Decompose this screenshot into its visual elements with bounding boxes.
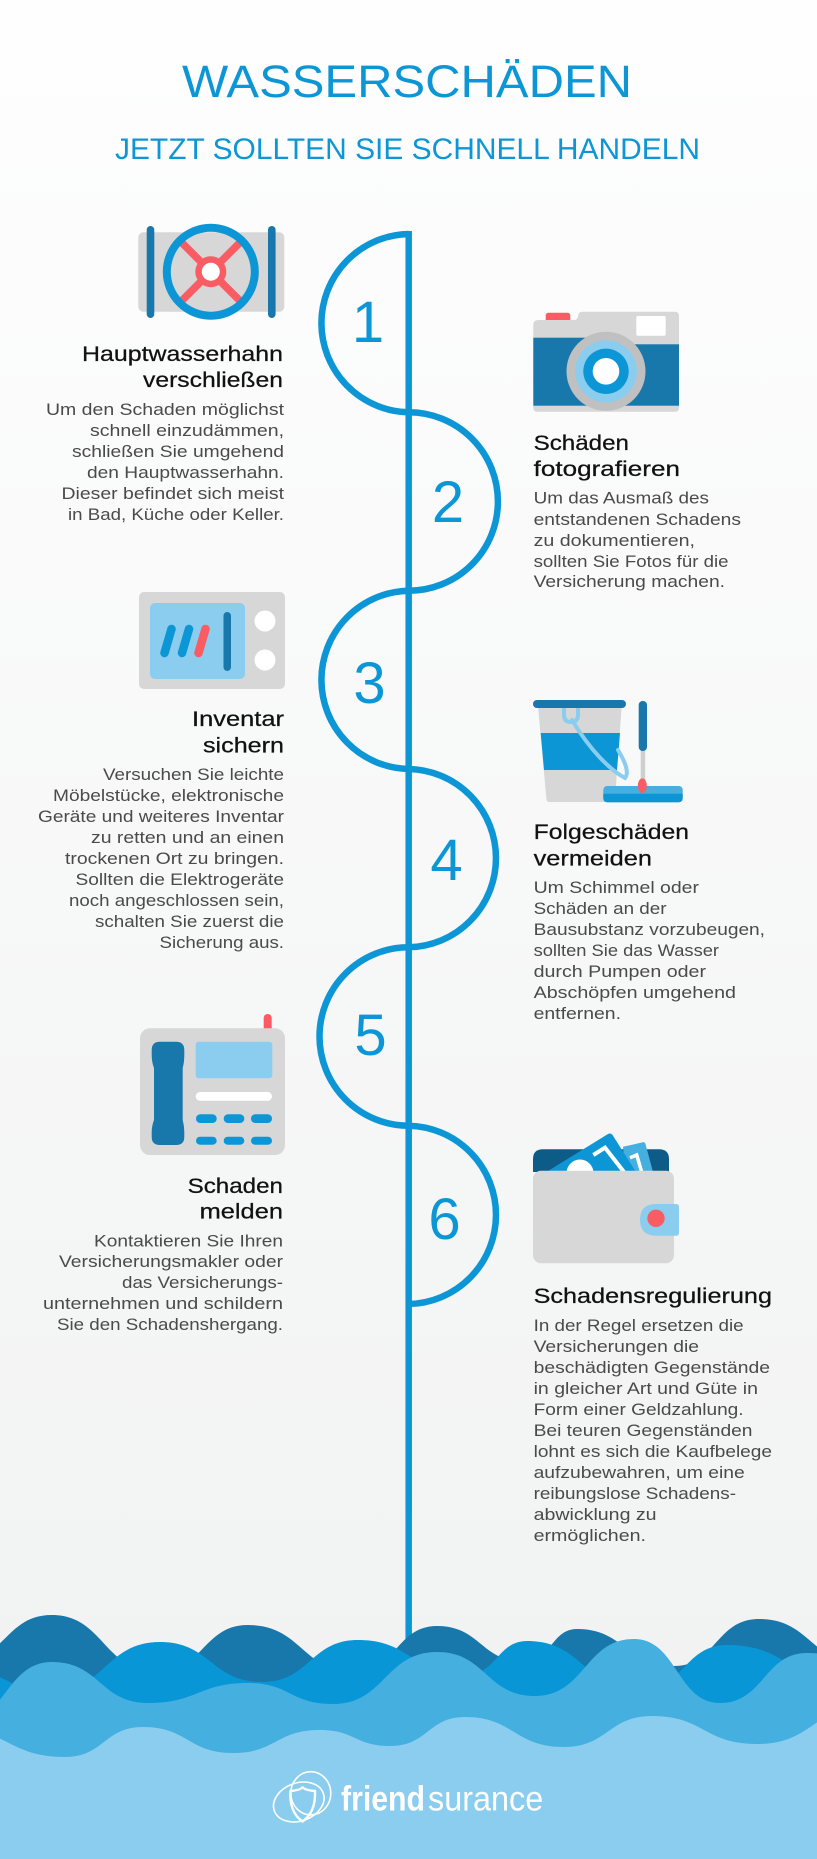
step numbers: 4 — [430, 828, 463, 893]
text block — [46, 400, 284, 524]
text block: zu retten und an einen — [91, 828, 284, 847]
panel: step 3 Inventar sichern — [38, 592, 285, 952]
panel: step 2 Schäden fotografieren — [533, 312, 741, 591]
icon: camera — [533, 312, 679, 412]
text block: Geräte und weiteres Inventar — [38, 807, 284, 826]
panel: step 1 Hauptwasserhahn — [46, 226, 284, 524]
text block: Sie den Schadenshergang. — [57, 1315, 283, 1334]
text block: zu dokumentieren, — [534, 531, 695, 550]
text block: entstandenen Schadens — [534, 510, 741, 529]
text block: Kontaktieren Sie Ihren — [94, 1231, 283, 1250]
heading: verschließen — [143, 369, 283, 392]
heading: Schaden — [188, 1175, 283, 1198]
wordmark: surance — [428, 1780, 543, 1819]
icon: bucket and mop — [533, 700, 683, 802]
text block: trockenen Ort zu bringen. — [65, 849, 284, 868]
text block: Dieser befindet sich meist — [62, 484, 284, 503]
text block — [534, 1316, 772, 1545]
text block — [38, 765, 284, 952]
text block: Möbelstücke, elektronische — [53, 786, 284, 805]
text block: schließen Sie umgehend — [72, 442, 284, 461]
text block: Um das Ausmaß des — [534, 488, 709, 508]
text block: Sicherung aus. — [160, 933, 284, 952]
heading — [534, 821, 689, 871]
step numbers — [352, 290, 464, 1252]
text block: In der Regel ersetzen die — [534, 1316, 744, 1335]
step numbers: 3 — [353, 651, 386, 716]
text block: entfernen. — [534, 1004, 621, 1023]
text block: in gleicher Art und Güte in — [534, 1379, 758, 1398]
text block: Form einer Geldzahlung. — [534, 1400, 744, 1419]
panel: step 6 Schadensregulierung — [533, 1133, 772, 1545]
text block: Versicherungsmakler oder — [59, 1252, 283, 1271]
icon: wallet — [533, 1133, 679, 1263]
text block: noch angeschlossen sein, — [69, 891, 284, 910]
step numbers: 5 — [354, 1003, 387, 1068]
text block — [43, 1231, 283, 1334]
heading: melden — [200, 1201, 283, 1224]
text block: abwicklung zu — [534, 1505, 657, 1524]
wordmark: friend — [341, 1780, 425, 1819]
heading — [82, 343, 283, 392]
title: WASSERSCHÄDEN — [182, 56, 632, 107]
heading: Folgeschäden — [534, 821, 689, 844]
text block: Schäden an der — [534, 899, 667, 918]
heading: Inventar — [192, 708, 284, 731]
text block — [534, 488, 741, 591]
text block: sollten Sie das Wasser — [534, 941, 719, 960]
text block: ermöglichen. — [534, 1526, 646, 1545]
text block: Abschöpfen umgehend — [534, 983, 736, 1002]
text block: das Versicherungs- — [122, 1273, 283, 1292]
text block — [534, 878, 765, 1023]
timeline: vertical line with semicircles — [320, 231, 498, 1650]
step numbers: 6 — [428, 1187, 461, 1252]
wordmark — [341, 1780, 543, 1819]
water waves — [0, 1615, 817, 1859]
text block: Versicherung machen. — [534, 572, 725, 591]
subtitle: JETZT SOLLTEN SIE SCHNELL HANDELN — [115, 133, 700, 166]
heading: Schadensregulierung — [534, 1285, 772, 1308]
icon: microwave — [139, 592, 285, 689]
step numbers: 2 — [432, 470, 464, 535]
text block: Sollten die Elektrogeräte — [76, 870, 284, 889]
heading: Schäden — [534, 432, 629, 455]
heading: Hauptwasserhahn — [82, 343, 283, 366]
heading — [192, 708, 284, 758]
icon: logo rings and shield — [268, 1772, 331, 1829]
icon: valve — [138, 226, 284, 318]
text block: Versuchen Sie leichte — [103, 765, 284, 784]
panel: step 4 Folgeschäden vermeiden — [533, 700, 765, 1023]
text block: in Bad, Küche oder Keller. — [68, 505, 284, 524]
text block: den Hauptwasserhahn. — [87, 463, 284, 482]
heading: fotografieren — [534, 458, 680, 481]
panel: step 5 Schaden melden — [43, 1014, 285, 1334]
heading: sichern — [203, 735, 284, 758]
text block: Um den Schaden möglichst — [46, 400, 284, 419]
heading — [534, 432, 680, 481]
text block: lohnt es sich die Kaufbelege — [534, 1442, 772, 1461]
heading — [188, 1175, 283, 1224]
text block: Um Schimmel oder — [534, 878, 699, 897]
text block: Bei teuren Gegenständen — [534, 1421, 752, 1440]
step numbers: 1 — [352, 290, 384, 355]
text block: unternehmen und schildern — [43, 1294, 283, 1313]
logo: friendsurance — [268, 1772, 543, 1829]
text block: Versicherungen die — [534, 1337, 699, 1356]
text block: beschädigten Gegenstände — [534, 1358, 770, 1377]
text block: durch Pumpen oder — [534, 962, 706, 981]
text block: schnell einzudämmen, — [90, 421, 284, 440]
text block: aufzubewahren, um eine — [534, 1463, 745, 1482]
text block: reibungslose Schadens- — [534, 1484, 736, 1503]
text block: schalten Sie zuerst die — [95, 912, 284, 931]
text block: Bausubstanz vorzubeugen, — [534, 920, 765, 939]
icon: telephone — [140, 1014, 285, 1155]
heading: vermeiden — [534, 848, 652, 871]
text block: sollten Sie Fotos für die — [534, 552, 728, 571]
